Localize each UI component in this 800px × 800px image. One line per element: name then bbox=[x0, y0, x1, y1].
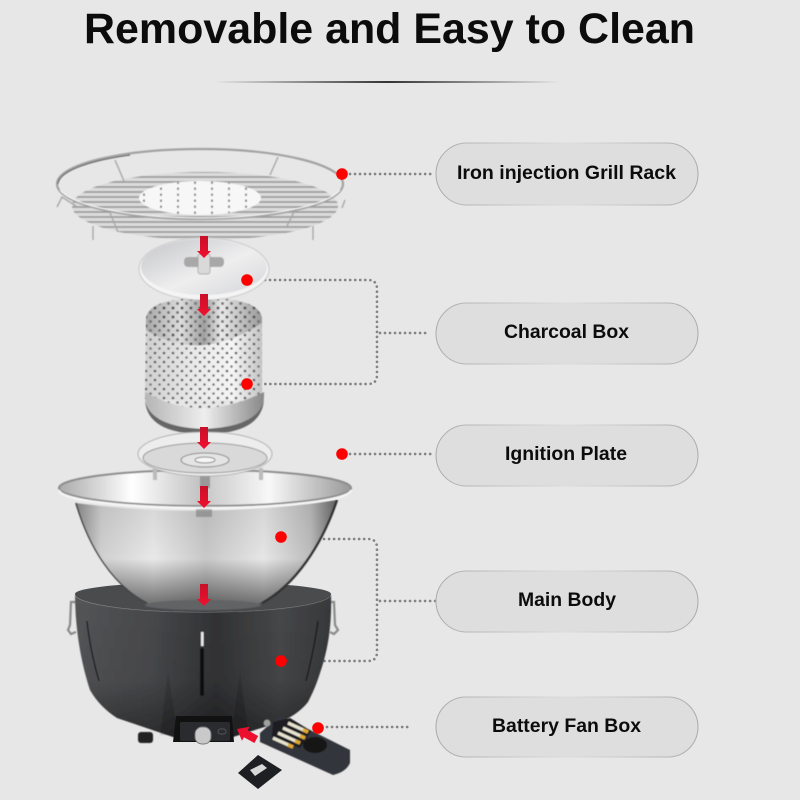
illustration: battery fan box bbox=[260, 715, 350, 775]
illustration: ignition plate bbox=[138, 432, 272, 488]
arrows bbox=[197, 236, 258, 743]
label: Ignition Plate bbox=[436, 425, 698, 486]
label: Main Body: Main Body bbox=[518, 590, 616, 611]
label: Charcoal Box: Charcoal Box bbox=[504, 322, 629, 343]
title: Removable and Easy to Clean bbox=[84, 5, 695, 53]
illustration: charcoal basket bbox=[145, 298, 264, 434]
label: Iron injection Grill Rack: Iron injection Grill Rack bbox=[457, 163, 676, 184]
label: Main Body bbox=[436, 571, 698, 632]
illustration: battery socket on base bbox=[173, 716, 234, 744]
connector lines bbox=[250, 174, 452, 727]
illustration: battery cover bbox=[238, 755, 282, 789]
label: Ignition Plate: Ignition Plate bbox=[505, 444, 627, 465]
label: Charcoal Box bbox=[436, 303, 698, 364]
label: Battery Fan Box: Battery Fan Box bbox=[492, 716, 641, 737]
illustration: main body interior bbox=[75, 582, 331, 612]
label: Battery Fan Box bbox=[436, 697, 698, 757]
illustration: charcoal box lid bbox=[139, 238, 269, 300]
illustration: steel bowl bbox=[59, 470, 351, 610]
illustration: main body base bbox=[68, 594, 338, 743]
title divider bbox=[215, 81, 560, 83]
illustration: grill rack bbox=[57, 149, 345, 240]
callout dots bbox=[241, 168, 348, 734]
label: Iron injection Grill Rack bbox=[436, 143, 698, 205]
